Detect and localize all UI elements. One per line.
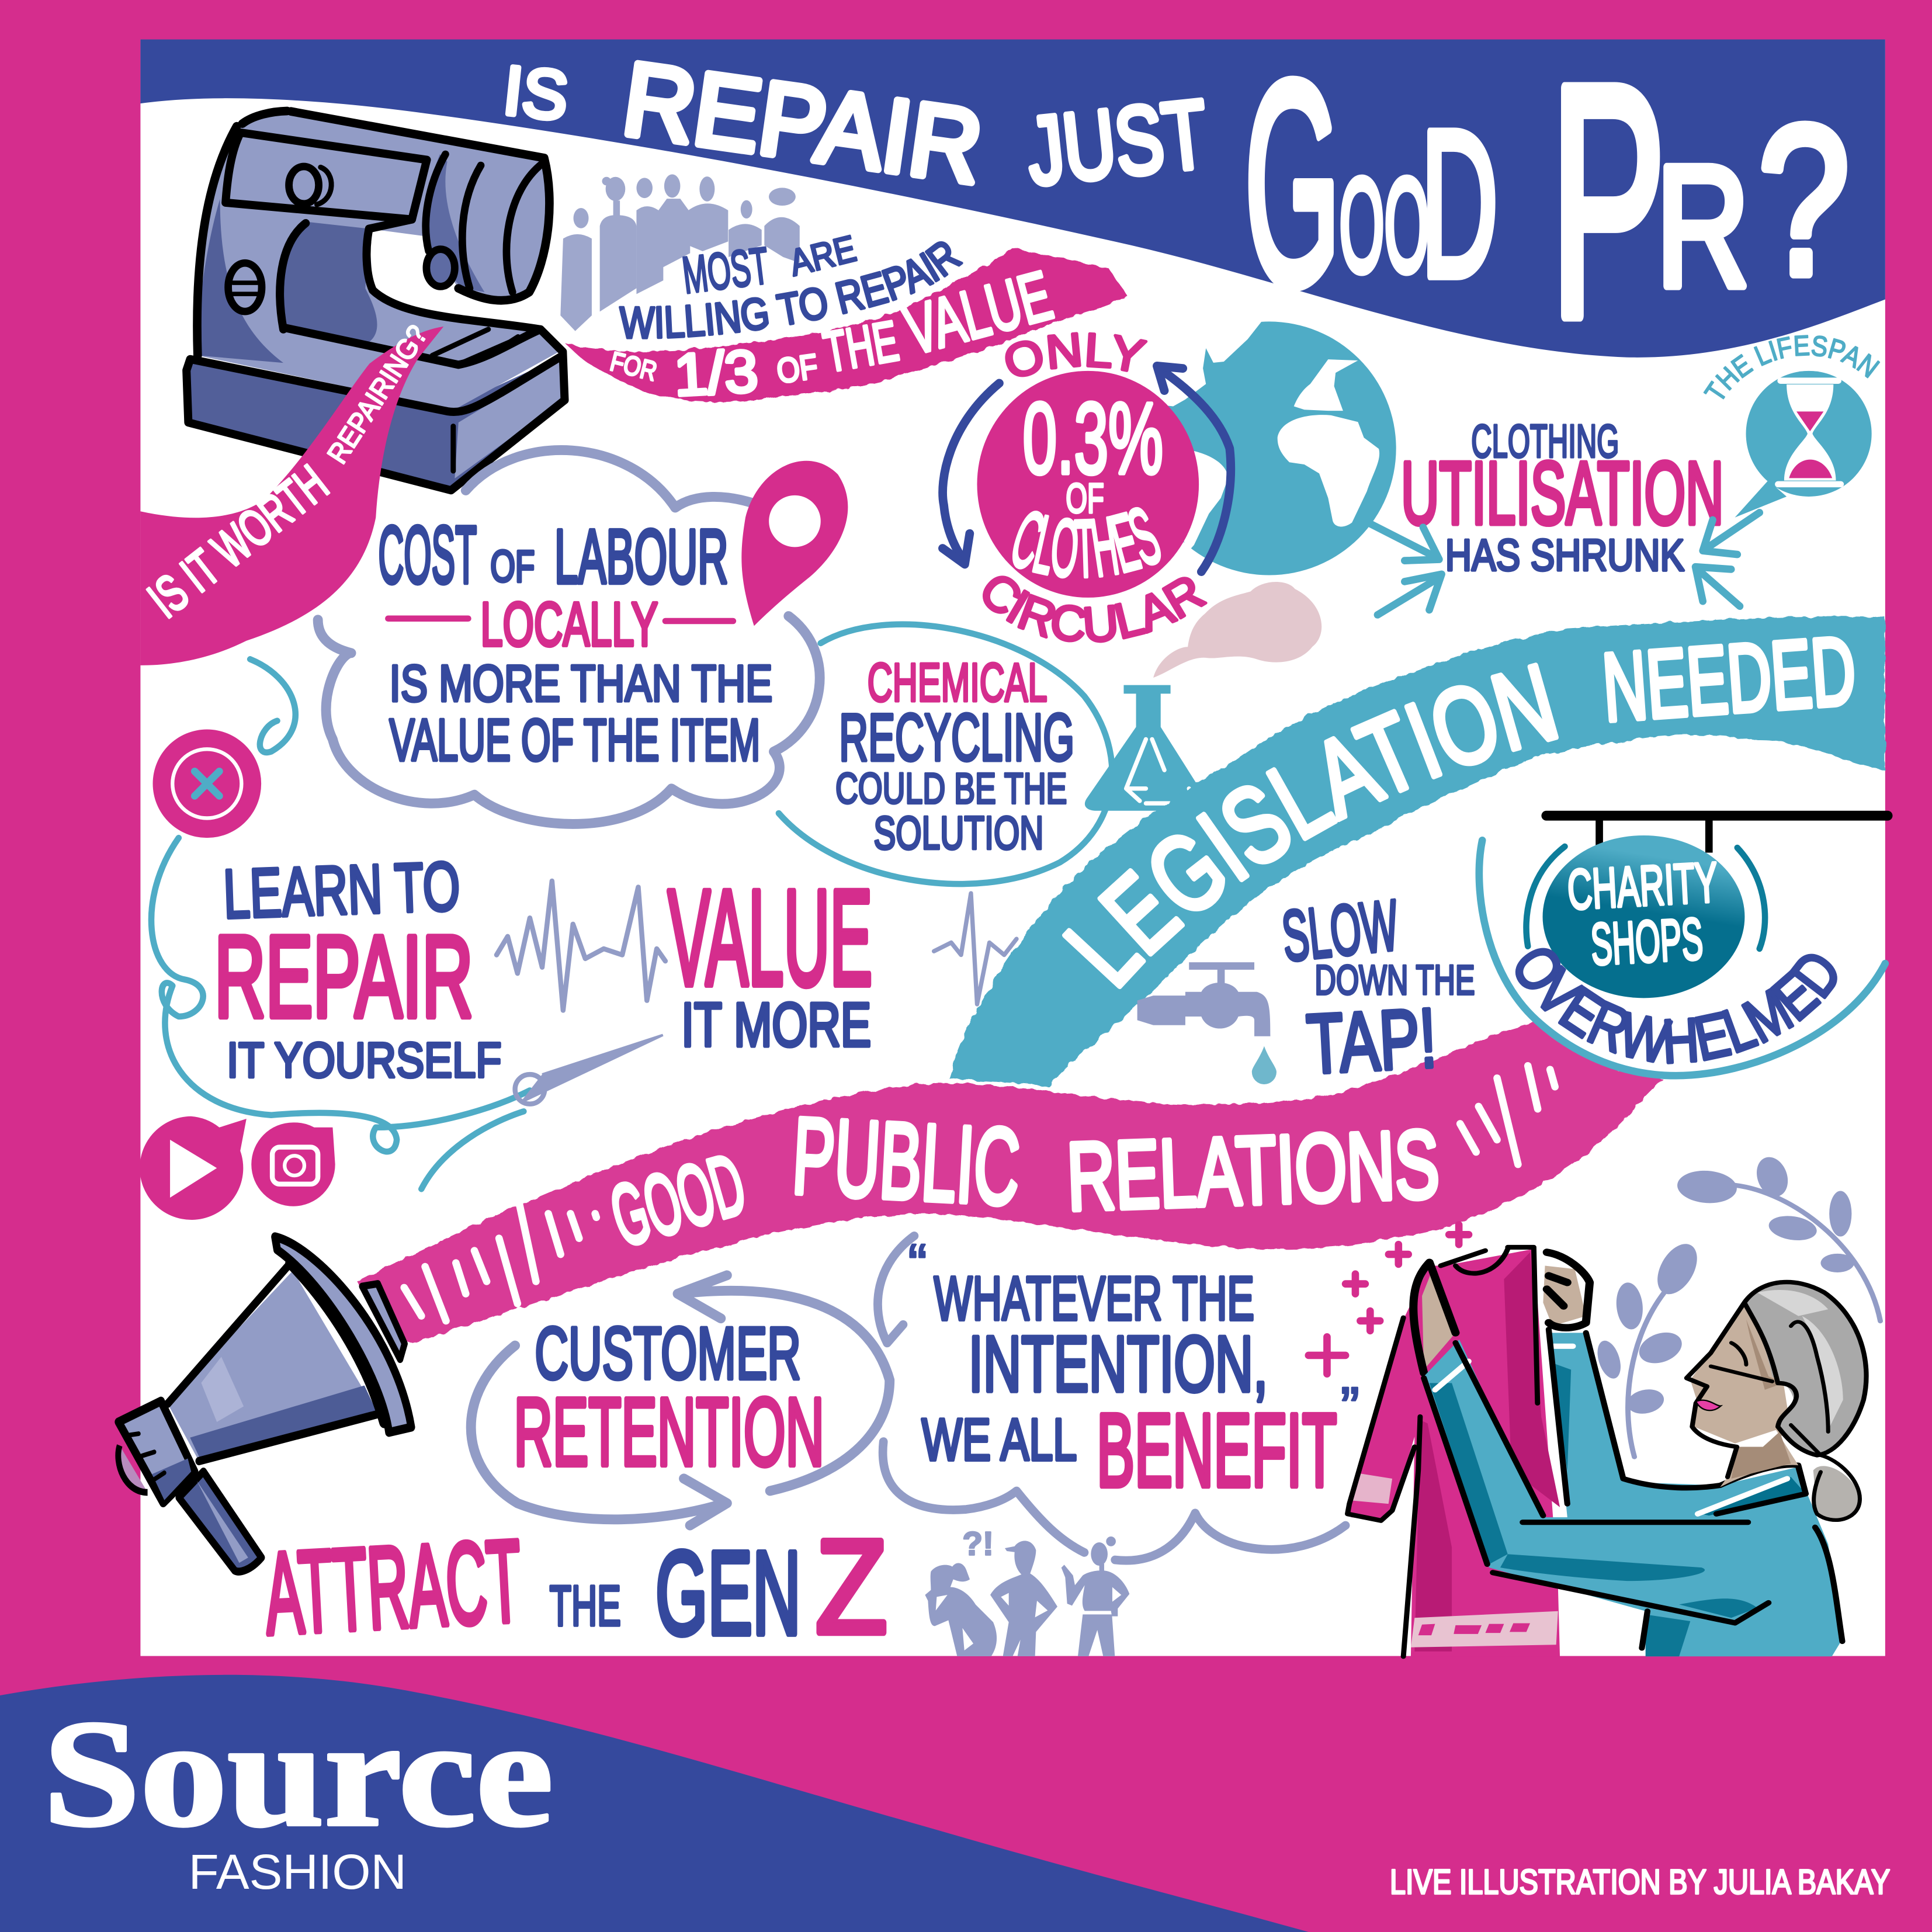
quote text: ”	[1341, 1375, 1359, 1439]
legislation text	[1043, 616, 1859, 1007]
title text: JUST	[1022, 79, 1212, 205]
text: most are willing to repair: MOST	[679, 237, 772, 304]
quote text: BENEFIT	[1097, 1393, 1337, 1508]
percentage text: 0.3%	[1023, 381, 1163, 495]
retention text: RETENTION	[514, 1378, 824, 1486]
ribbon text: VALUE	[897, 257, 1060, 370]
quote text: INTENTION,	[969, 1320, 1268, 1408]
panel: 0.3 percent circular	[938, 332, 1235, 643]
arrows: shrinking	[1370, 512, 1760, 615]
panel: cost of labour cloud	[318, 450, 848, 824]
percentage text	[1012, 381, 1163, 578]
legislation text: LEGISLATION	[1062, 663, 1559, 990]
footer blue swoosh	[0, 1675, 1309, 1932]
ribbon text: FOR	[607, 346, 660, 387]
icon: hourglass bubble	[1699, 329, 1885, 518]
ribbon: good public relations	[358, 1023, 1663, 1343]
icon: megaphone	[118, 1237, 411, 1572]
text: value it more: IT MORE	[681, 991, 871, 1060]
quote text: WE ALL	[922, 1407, 1077, 1473]
sign text: CHARITY	[1566, 850, 1719, 921]
circular arrows	[942, 366, 1231, 572]
text: slow down the tap: DOWN THE	[1314, 957, 1475, 1004]
title text: ?	[1758, 82, 1850, 318]
retention text	[514, 1312, 824, 1486]
panel: chemical recycling bubble	[779, 625, 1112, 884]
illustration: woman with garment	[1348, 1154, 1881, 1656]
icon: flask with smoke	[1085, 582, 1321, 811]
title text: R	[1656, 130, 1750, 322]
cost of labour text: COST	[378, 510, 477, 601]
pink ribbon: for 1/3 of the value	[564, 248, 1128, 408]
title banner	[140, 16, 1885, 386]
ribbon text: PUBLIC	[790, 1095, 1022, 1228]
text: clothing utilisation has shrunk: UTILISATION	[1401, 444, 1724, 543]
title text: G	[1244, 22, 1341, 345]
text: clothing utilisation has shrunk	[1401, 414, 1724, 580]
panel: quote bubble	[877, 1225, 1469, 1560]
ribbon text	[601, 1095, 1441, 1265]
cost of labour text: VALUE OF THE ITEM	[389, 707, 760, 773]
button and thread	[151, 659, 663, 1189]
ribbon text: OF	[775, 347, 820, 391]
head and hair	[1687, 1282, 1867, 1520]
overwhelmed curved text: OVERWHELMED	[1515, 948, 1837, 1064]
sign text: SHOPS	[1589, 906, 1705, 977]
icon: instagram bubble	[251, 1122, 335, 1206]
only and circular curved labels: CIRCULAR	[983, 575, 1208, 643]
quote text: WHATEVER THE	[934, 1265, 1254, 1333]
ribbon text: IS IT WORTH	[137, 454, 338, 629]
people silhouettes	[925, 1526, 1129, 1656]
bubble text	[835, 652, 1074, 859]
cost of labour text	[378, 510, 772, 773]
title text	[500, 16, 1850, 386]
text: attract the gen z: Z	[816, 1513, 887, 1661]
text: learn to repair it yourself: LEARN TO	[222, 848, 461, 933]
ribbon text: THE	[819, 308, 903, 384]
only and circular curved labels: ONLY	[1005, 332, 1147, 377]
title text: OO	[1340, 151, 1430, 300]
bubble text: RECYCLING	[839, 700, 1074, 775]
title text: P	[1550, 16, 1666, 386]
leaf branches	[1593, 1154, 1881, 1457]
cost of labour text: OF	[490, 542, 535, 591]
icon: button	[153, 730, 261, 838]
crowd silhouettes	[560, 174, 800, 331]
text: most are willing to repair: WILLING TO REPAIR	[619, 241, 963, 339]
text: clothing utilisation has shrunk: HAS SHRUNK	[1445, 530, 1684, 580]
bubble text: CHEMICAL	[868, 652, 1047, 713]
text: attract the gen z: ATTRACT	[262, 1517, 525, 1659]
brush band: legislation needed	[949, 616, 1885, 1087]
text: VALUE	[668, 862, 872, 1014]
bubble text: COULD BE THE	[835, 764, 1067, 813]
sparkle pluses	[1309, 1225, 1469, 1374]
logo: source fashion: FASHION	[189, 1844, 407, 1899]
the lifespan curved text: THE LIFESPAN	[1704, 335, 1880, 400]
text: attract the gen z: THE	[550, 1574, 621, 1638]
icon: sewing machine	[186, 111, 567, 490]
logo: source fashion: Source	[43, 1689, 553, 1858]
text: value it more	[668, 862, 872, 1060]
sound wave bars	[404, 1066, 1555, 1321]
icon: charity shop sign	[1479, 816, 1888, 1077]
text: most are willing to repair: ARE	[786, 228, 860, 284]
text: slow down the tap	[1278, 885, 1475, 1091]
percentage text: CLOTHES	[1012, 507, 1161, 578]
people silhouettes: ?!	[962, 1526, 994, 1563]
text: clothing utilisation has shrunk: CLOTHING	[1471, 414, 1619, 467]
icon: video play bubble	[140, 1116, 247, 1220]
text: attract the gen z: GEN	[655, 1527, 801, 1659]
sweater	[1424, 1330, 1843, 1656]
quote text: “	[908, 1233, 927, 1296]
retention text: CUSTOMER	[535, 1312, 801, 1395]
title text: IS	[500, 52, 572, 135]
cost of labour text: LABOUR	[554, 514, 728, 599]
cost of labour text: IS MORE THAN THE	[389, 654, 772, 712]
ribbon text	[607, 257, 1060, 408]
icon: location pin	[741, 461, 848, 626]
ribbon: is it worth repairing	[137, 320, 443, 665]
text: slow down the tap: TAP!	[1305, 991, 1439, 1091]
quote text	[908, 1233, 1359, 1508]
text: learn to repair it yourself: REPAIR	[214, 913, 473, 1042]
panel: customer retention loop	[471, 1275, 890, 1525]
ribbon text: 1/3	[672, 338, 759, 408]
ribbon text: RELATIONS	[1065, 1110, 1441, 1230]
only and circular curved labels	[983, 332, 1208, 643]
needle	[520, 1035, 663, 1103]
text: learn to repair it yourself: IT YOURSELF	[227, 1032, 501, 1087]
title text: REPAIR	[617, 40, 989, 205]
white canvas panel	[140, 39, 1885, 1656]
ribbon text: REPAIRING?	[321, 320, 434, 469]
icon: tap	[1137, 966, 1277, 1084]
hands	[1422, 1266, 1586, 1369]
waveform lines	[497, 881, 1017, 1010]
text: learn to repair it yourself	[214, 848, 501, 1087]
ribbon text: GOOD	[601, 1136, 755, 1265]
bubble text: SOLUTION	[873, 806, 1043, 859]
text: slow down the tap: SLOW	[1278, 885, 1402, 976]
title text: D	[1421, 86, 1499, 320]
percentage text: OF	[1066, 475, 1104, 522]
cost of labour text: LOCALLY	[481, 591, 658, 659]
garment	[1348, 1247, 1560, 1656]
sign text	[1566, 850, 1719, 977]
icon: globe	[1114, 320, 1396, 575]
